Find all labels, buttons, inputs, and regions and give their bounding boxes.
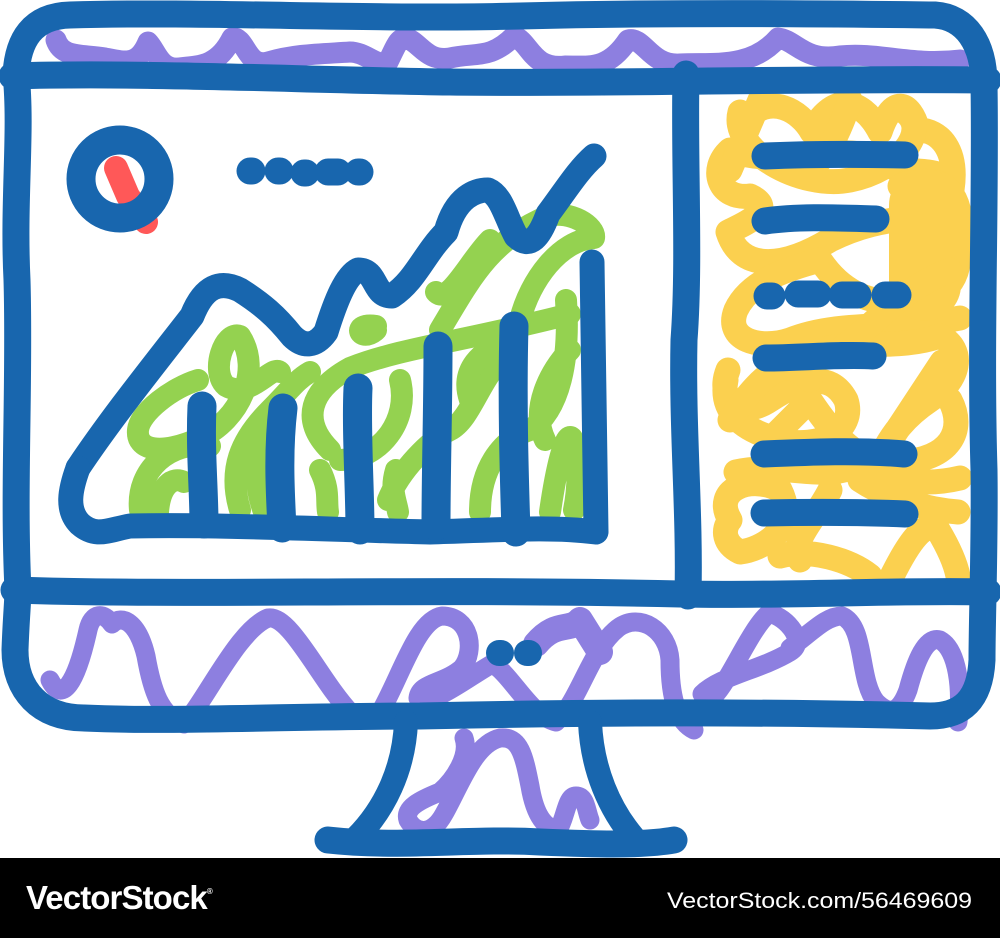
yellow scribble: side panel — [719, 100, 960, 576]
bar chart — [201, 326, 516, 532]
footer bar — [0, 858, 1000, 938]
monitor frame — [15, 14, 984, 719]
line chart with axes — [71, 156, 596, 532]
bar 1 — [201, 406, 204, 524]
list line 6 — [764, 512, 905, 514]
purple scribble: bottom bezel — [50, 614, 959, 730]
purple scribble: top bezel — [56, 36, 960, 68]
list line 3 dashes — [767, 294, 898, 296]
panel divider — [684, 74, 688, 596]
stand right leg — [590, 722, 634, 838]
legend dots — [250, 171, 360, 173]
footer logo: ® — [207, 887, 213, 896]
list line 4 — [766, 355, 873, 358]
list line 1 — [765, 154, 905, 156]
bar 2 — [280, 408, 283, 528]
footer logo: VectorStock — [26, 879, 207, 916]
top bar line — [12, 75, 988, 82]
bar 5 — [513, 326, 516, 532]
bottom bar line — [14, 590, 988, 594]
monitor power button dots — [499, 640, 529, 666]
chart outline — [78, 156, 594, 468]
stand left leg — [356, 722, 406, 838]
bar 4 — [436, 346, 438, 526]
green scribble: area under line chart — [138, 215, 594, 512]
side panel list lines — [764, 154, 905, 514]
chart base — [71, 262, 596, 532]
stand base — [328, 840, 674, 844]
footer url: VectorStock.com/56469609 — [667, 888, 972, 913]
list line 5 — [764, 452, 904, 454]
purple scribble: monitor stand — [407, 738, 590, 831]
donut chart: red segment — [116, 168, 146, 222]
bar 3 — [357, 388, 360, 530]
donut chart: blue ring — [81, 140, 159, 218]
list line 2 — [765, 218, 876, 221]
